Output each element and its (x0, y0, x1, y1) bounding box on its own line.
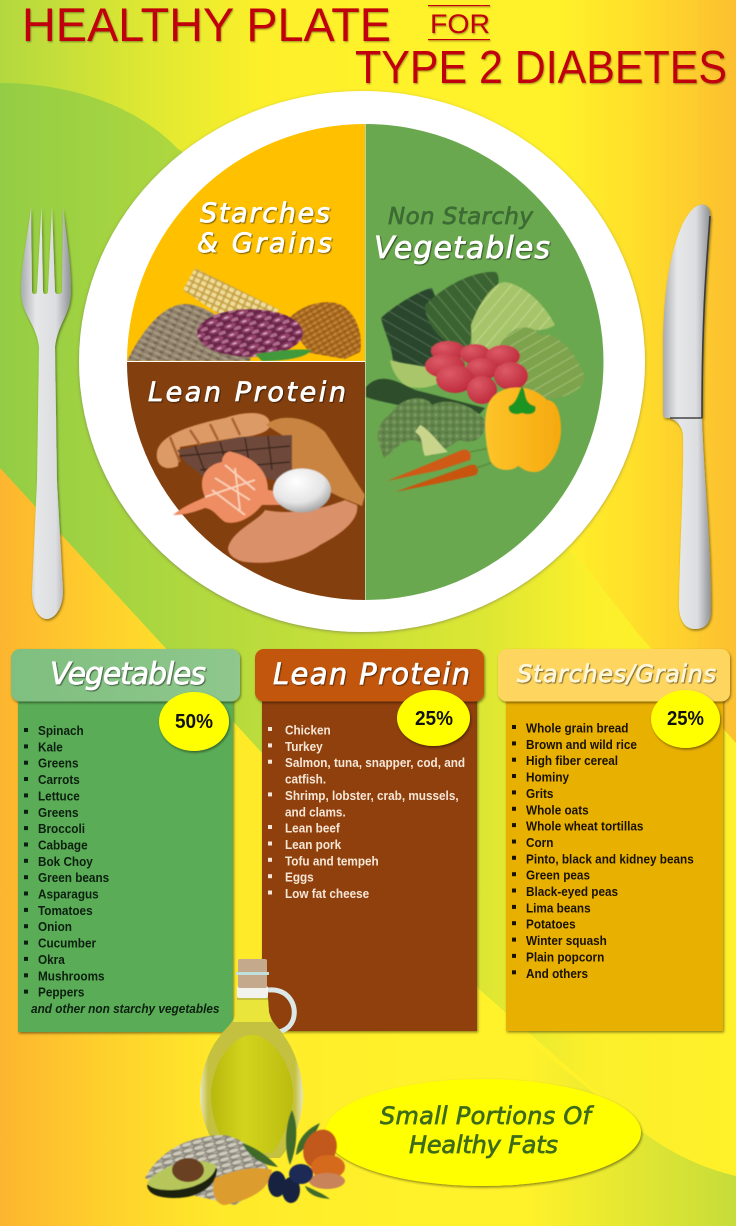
percent badge (159, 692, 229, 751)
heading: starches & grains (197, 198, 332, 259)
percent badge: 25% (667, 708, 704, 730)
percent badge: 25% (415, 708, 453, 730)
bullet list: Corn (526, 836, 553, 850)
bullet list: Green peas (526, 868, 590, 883)
bullet list (24, 724, 220, 1016)
bullet list: Tomatoes (38, 904, 93, 918)
percent badge: 50% (175, 711, 213, 733)
card header (11, 649, 240, 702)
bullet list: Potatoes (526, 917, 576, 932)
bullet list: and other non starchy vegetables (31, 1002, 220, 1016)
bullet list: Broccoli (38, 822, 85, 836)
icon: knife (663, 204, 711, 629)
percent badge (397, 690, 470, 746)
card title: Starches/Grains (517, 660, 716, 688)
bullet list: Tofu and tempeh (285, 854, 379, 868)
bullet list: Pinto, black and kidney beans (526, 852, 694, 866)
bullet list: Whole wheat tortillas (526, 819, 644, 834)
icon: fork (21, 207, 71, 619)
bullet list: Okra (38, 953, 65, 967)
bullet list: Whole grain bread (526, 721, 628, 736)
title: FOR (430, 9, 490, 39)
heading: starches & grains: Starches (200, 198, 330, 229)
bullet list: Grits (526, 787, 554, 801)
bullet list: Shrimp, lobster, crab, mussels, (285, 789, 459, 803)
card title: Vegetables (50, 657, 206, 692)
icon: starches food pile (127, 268, 361, 361)
bullet list: Greens (38, 756, 79, 771)
bullet list: Low fat cheese (285, 887, 369, 901)
icon: protein food pile (157, 413, 365, 563)
bullet list: Cabbage (38, 838, 88, 853)
bullet list: Carrots (38, 773, 80, 787)
bullet list: Black-eyed peas (526, 885, 618, 899)
bullet list: Eggs (285, 870, 314, 885)
panel: lean protein section (127, 362, 365, 600)
card header (255, 649, 484, 702)
bullet list: Bok Choy (38, 854, 93, 869)
bullet list: Onion (38, 920, 72, 934)
title: HEALTHY PLATE (22, 0, 391, 52)
title (22, 0, 727, 93)
bullet list: Green beans (38, 871, 109, 885)
panel: starches section (127, 124, 365, 361)
bullet list (268, 723, 465, 901)
bullet list: Asparagus (38, 887, 99, 902)
bullet list: Peppers (38, 985, 85, 1000)
bullet list: Chicken (285, 723, 331, 738)
bullet list: Cucumber (38, 936, 96, 951)
panel: vegetables card (11, 649, 240, 1032)
bullet list: Mushrooms (38, 969, 105, 983)
bullet list: Kale (38, 740, 63, 754)
heading: non starchy vegetables (374, 204, 550, 266)
bullet list: Greens (38, 805, 79, 820)
bullet list: Turkey (285, 740, 323, 754)
bullet list: Hominy (526, 770, 569, 785)
panel: starches card (498, 649, 730, 1031)
callout: small portions of healthy fats (325, 1079, 641, 1186)
bullet list: Plain popcorn (526, 950, 604, 964)
bullet list: And others (526, 966, 588, 981)
panel: lean protein card (255, 649, 484, 1031)
bullet list: Brown and wild rice (526, 738, 637, 752)
bullet list: Lean pork (285, 838, 341, 852)
panel: vegetables section (366, 124, 604, 600)
bullet list: High fiber cereal (526, 754, 618, 768)
callout: small portions of healthy fats: Healthy Fats (409, 1131, 558, 1159)
heading: non starchy vegetables: Vegetables (374, 231, 550, 266)
bullet list: Whole oats (526, 803, 589, 817)
plate (79, 91, 645, 632)
bullet list: Spinach (38, 724, 84, 738)
bullet list: catfish. (285, 772, 326, 787)
heading: non starchy vegetables: Non Starchy (388, 204, 533, 230)
bullet list (512, 721, 694, 981)
bullet list: Lean beef (285, 821, 341, 836)
bullet list: Winter squash (526, 934, 607, 948)
bullet list: and clams. (285, 805, 346, 819)
icon: vegetables pile (366, 272, 585, 492)
card header (498, 649, 730, 702)
icon: olive oil bottle (200, 959, 303, 1158)
heading: lean protein: Lean Protein (148, 377, 346, 408)
bullet list: Lettuce (38, 789, 80, 803)
heading: starches & grains: & Grains (197, 228, 332, 259)
bullet list: Salmon, tuna, snapper, cod, and (285, 756, 465, 770)
bullet list: Lima beans (526, 901, 591, 915)
percent badge (651, 690, 720, 748)
card title: Lean Protein (273, 657, 470, 691)
icon: healthy fats foods (145, 1110, 345, 1205)
callout: small portions of healthy fats: Small Portions Of (380, 1102, 595, 1130)
